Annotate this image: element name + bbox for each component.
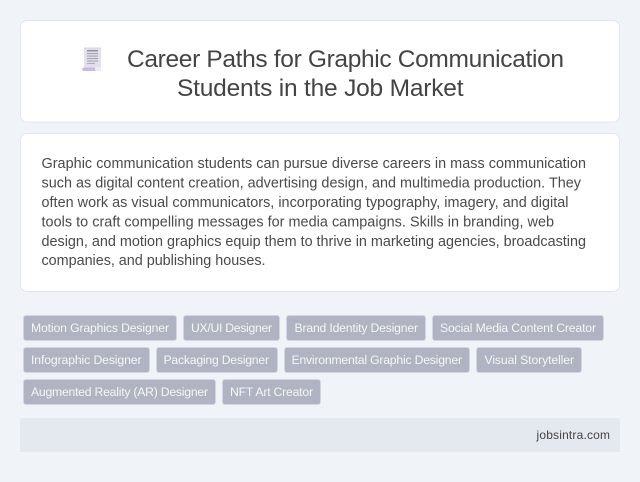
tag: Visual Storyteller: Visual Storyteller — [484, 353, 574, 367]
tag: Brand Identity Designer: Brand Identity Designer — [294, 321, 418, 335]
tag: Environmental Graphic Designer — [284, 348, 470, 372]
tag: NFT Art Creator — [222, 380, 320, 404]
tag: Infographic Designer: Infographic Designer — [31, 353, 142, 367]
tag: NFT Art Creator: NFT Art Creator — [230, 385, 313, 399]
tag: Augmented Reality (AR) Designer — [24, 380, 216, 404]
tag: Motion Graphics Designer: Motion Graphics Designer — [31, 321, 169, 335]
tag: Motion Graphics Designer — [24, 316, 176, 340]
footer source text: jobsintra.com — [536, 428, 610, 442]
description text: often work as visual communicators, incorporating typography, imagery, and digital — [42, 195, 568, 211]
tag: UX/UI Designer: UX/UI Designer — [191, 321, 272, 335]
tag: Packaging Designer: Packaging Designer — [164, 353, 269, 367]
tag: Social Media Content Creator: Social Media Content Creator — [440, 321, 596, 335]
footer — [20, 418, 620, 452]
panel: description — [20, 134, 620, 292]
tag: Infographic Designer — [24, 348, 150, 372]
tag: Brand Identity Designer — [286, 316, 426, 340]
description text: design, and motion graphics equip them to thrive in marketing agencies, broadcasting — [42, 234, 586, 250]
panel: header — [20, 20, 620, 122]
tag: Packaging Designer — [156, 348, 278, 372]
career tags — [24, 316, 604, 404]
title — [127, 46, 564, 102]
tag: Environmental Graphic Designer: Environmental Graphic Designer — [292, 353, 462, 367]
description text: tools to craft compelling messages for media campaigns. Skills in branding, web — [42, 214, 554, 230]
description text: companies, and publishing houses. — [42, 253, 266, 269]
description text: such as digital content creation, advertising design, and multimedia production. They — [42, 176, 582, 192]
title: Students in the Job Market — [177, 75, 464, 102]
tag: UX/UI Designer — [184, 316, 280, 340]
tag: Augmented Reality (AR) Designer: Augmented Reality (AR) Designer — [31, 385, 208, 399]
title: Career Paths for Graphic Communication — [127, 46, 564, 73]
tag: Visual Storyteller — [476, 348, 582, 372]
tag: Social Media Content Creator — [432, 316, 604, 340]
icon: document scroll — [82, 48, 101, 71]
description text: Graphic communication students can pursue diverse careers in mass communication — [42, 156, 586, 172]
description text — [42, 156, 586, 269]
